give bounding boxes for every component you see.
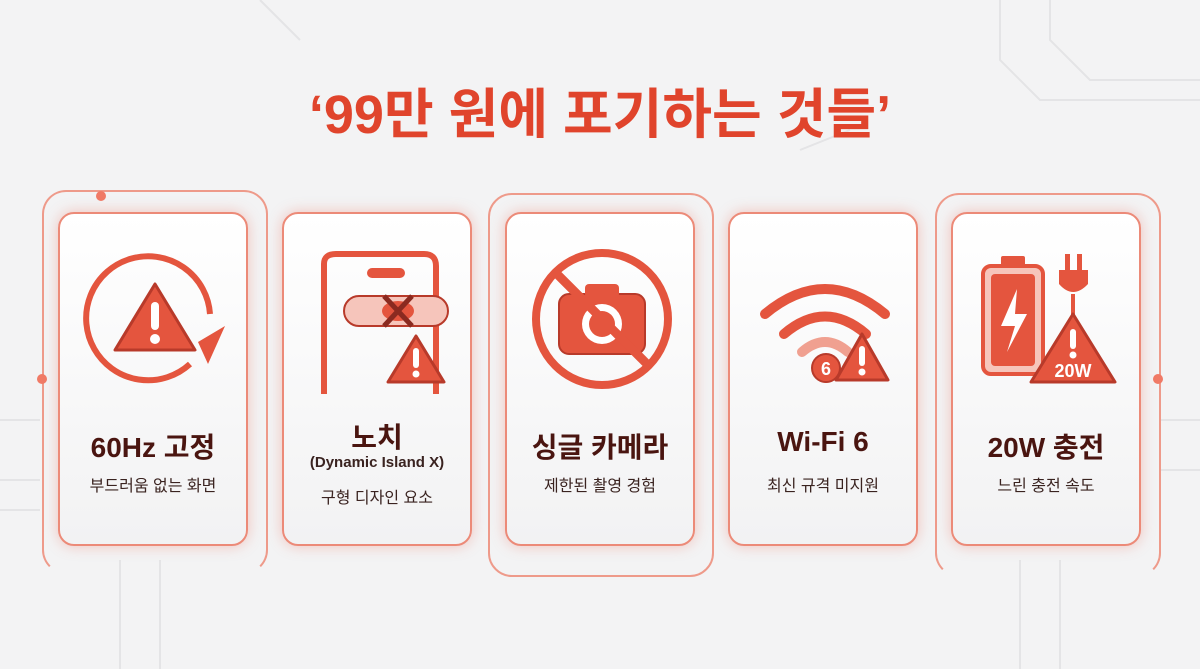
icon: refresh warning (83, 253, 225, 384)
heading: 노치 (351, 422, 403, 453)
icon: battery 20W: 20W (1054, 361, 1092, 381)
icon: wifi 6 warning (760, 284, 890, 383)
icon: wifi 6 warning: 6 (821, 359, 831, 379)
subtext: 제한된 촬영 경험 (544, 478, 656, 495)
icon: phone notch (321, 251, 449, 394)
subtext: 최신 규격 미지원 (767, 478, 879, 495)
heading: 60Hz 고정 (91, 432, 215, 463)
subtext: 느린 충전 속도 (997, 478, 1095, 495)
card: charging (951, 212, 1141, 546)
icon: no camera (532, 249, 672, 389)
subtext: 구형 디자인 요소 (321, 490, 433, 507)
heading: 싱글 카메라 (532, 432, 668, 463)
card: camera (505, 212, 695, 546)
subtext: 부드러움 없는 화면 (90, 478, 216, 495)
heading: 20W 충전 (988, 432, 1104, 463)
heading: Wi-Fi 6 (777, 426, 869, 457)
circuit frames (37, 190, 1163, 577)
card: notch (282, 212, 472, 546)
icon: battery 20W (981, 254, 1117, 384)
card: wifi (728, 212, 918, 546)
card: 60Hz (58, 212, 248, 546)
title: ‘99만 원에 포기하는 것들’ (309, 85, 891, 145)
card: notch: (Dynamic Island X) (310, 454, 444, 471)
